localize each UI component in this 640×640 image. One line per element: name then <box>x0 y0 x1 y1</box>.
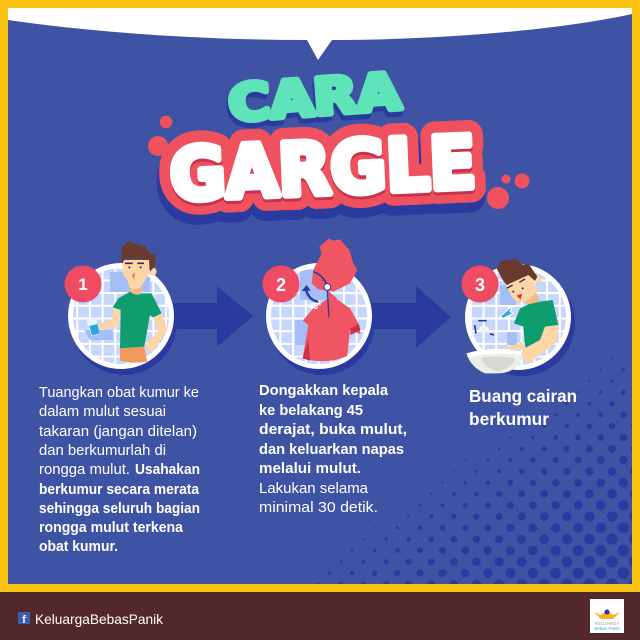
footer handle: KeluargaBebasPanik <box>35 611 164 627</box>
title: CARA: CARA <box>225 68 401 138</box>
text block: step 1: sehingga seluruh bagian <box>39 501 200 517</box>
text block: step 1: rongga mulut terkena <box>39 520 184 536</box>
text block: step 1: takaran (jangan ditelan) <box>39 424 197 440</box>
badge: 1: 1 <box>78 275 88 294</box>
title: GARGLE: GARGLE <box>168 120 477 217</box>
text block: step 3: Buang cairan <box>469 386 577 406</box>
text block: step 1: berkumur secara merata <box>39 482 200 498</box>
circle shadow <box>269 269 375 375</box>
title: GARGLE: GARGLE <box>167 129 476 226</box>
text block: step 2: dan keluarkan napas <box>259 441 404 458</box>
title: CARA: CARA <box>227 63 403 133</box>
circle frame <box>68 263 174 369</box>
footer <box>0 592 640 640</box>
text block: step 2: Dongakkan kepala <box>259 382 389 399</box>
text block: step 1: obat kumur. <box>39 539 118 555</box>
circle shadow <box>469 270 575 376</box>
man spitting over sink <box>467 259 558 373</box>
title: GARGLE: GARGLE <box>168 120 477 217</box>
text block: step 1: dan berkumurlah di <box>39 443 166 459</box>
text block: step 1: Usahakan <box>135 462 200 478</box>
tile wall <box>271 268 367 364</box>
arrow: step 2 to 3 <box>368 286 451 348</box>
icon: facebook: f <box>22 614 26 626</box>
logo: Bebas Panik <box>594 626 620 631</box>
footer bar <box>0 592 640 640</box>
step 2 illustration <box>262 238 375 375</box>
text block: step 2: ke belakang 45 <box>259 402 363 419</box>
badge: 2: 2 <box>276 275 286 295</box>
text block: step 1 <box>39 385 200 555</box>
tile wall <box>73 268 169 364</box>
man gargling <box>86 240 168 363</box>
text block: step 2 <box>259 382 407 516</box>
text block: step 3: berkumur <box>469 409 549 429</box>
text block: step 2: minimal 30 detik. <box>259 499 378 516</box>
tile wall <box>472 272 566 365</box>
step 3 illustration <box>462 259 575 376</box>
arrow: step 1 to 2 <box>170 286 253 347</box>
text block: step 2: derajat, buka mulut, <box>259 421 407 438</box>
text block: step 1: rongga mulut. <box>39 462 130 478</box>
step 1 illustration <box>64 240 177 375</box>
angle label: 45° <box>309 302 321 311</box>
icon: facebook <box>18 612 30 626</box>
text block: step 2: Lakukan selama <box>259 480 369 497</box>
text block: step 2: melalui mulut. <box>259 460 361 477</box>
logo <box>590 599 624 633</box>
title <box>148 63 530 226</box>
circle frame <box>465 264 571 370</box>
text block: step 1: dalam mulut sesuai <box>39 404 166 420</box>
text block: step 1: Tuangkan obat kumur ke <box>39 385 199 401</box>
title: GARGLE: GARGLE <box>168 123 478 220</box>
badge: 3: 3 <box>475 275 485 295</box>
head tilt silhouette <box>302 238 361 361</box>
text block: step 3 <box>469 386 577 429</box>
speech bubble <box>8 8 632 60</box>
circle frame <box>266 263 372 369</box>
circle shadow <box>71 269 177 375</box>
title bubbles <box>148 116 530 209</box>
logo: KELUARGA <box>595 621 619 626</box>
halftone dot pattern <box>284 346 632 584</box>
